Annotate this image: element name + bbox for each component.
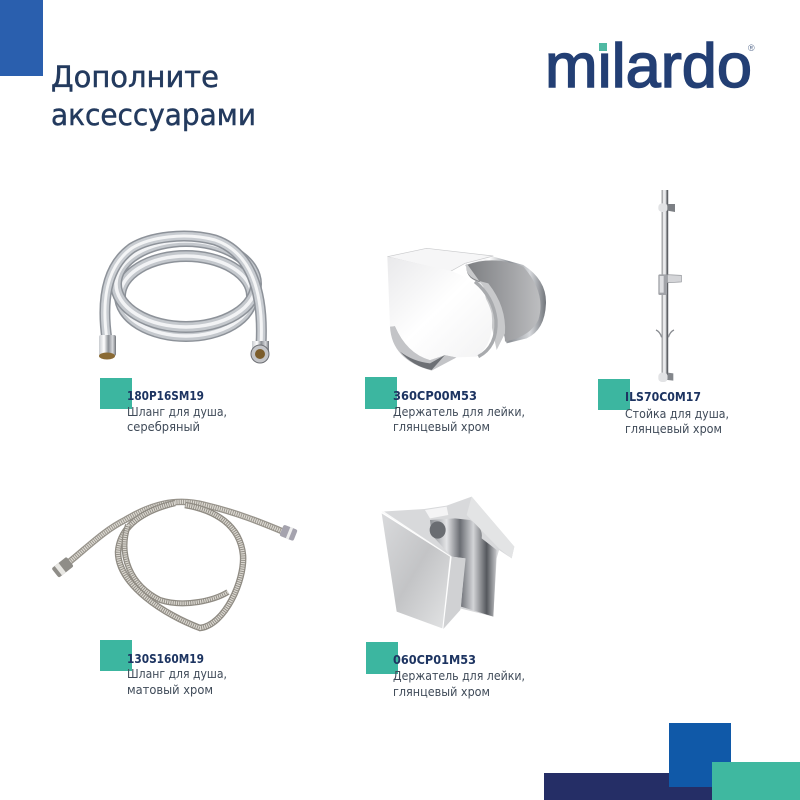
description: Шланг для душа, bbox=[127, 667, 227, 681]
description: Стойка для душа, bbox=[625, 407, 729, 421]
description: серебряный bbox=[127, 420, 200, 434]
description: глянцевый хром bbox=[393, 685, 490, 699]
description bbox=[127, 667, 227, 697]
description: глянцевый хром bbox=[625, 422, 722, 436]
description: Держатель для лейки, bbox=[393, 405, 525, 419]
teal square bbox=[366, 642, 398, 674]
teal square bbox=[365, 377, 397, 409]
description: матовый хром bbox=[127, 683, 213, 697]
description: Шланг для душа, bbox=[127, 405, 227, 419]
description bbox=[625, 407, 729, 436]
logo: milardo: ® bbox=[748, 43, 755, 53]
description: Держатель для лейки, bbox=[393, 669, 525, 683]
teal square bbox=[598, 379, 630, 410]
hose image bbox=[68, 502, 284, 628]
title: Дополните bbox=[51, 60, 219, 94]
hose image bbox=[105, 236, 261, 345]
product 4: metal hose bbox=[51, 502, 298, 697]
code: 180P16SM19 bbox=[127, 388, 204, 403]
hose connectors bbox=[51, 557, 74, 578]
product 1: silver hose bbox=[99, 236, 269, 434]
description bbox=[127, 405, 227, 434]
code: 130S160M19 bbox=[127, 651, 204, 666]
code: ILS70C0M17 bbox=[625, 389, 701, 404]
code: 360CP00M53 bbox=[393, 388, 477, 403]
title bbox=[51, 60, 256, 132]
product 2: white holder bbox=[365, 248, 546, 434]
teal square bbox=[100, 378, 132, 409]
holder image bbox=[387, 248, 546, 371]
product 5: chrome holder bbox=[366, 497, 525, 699]
code: 060CP01M53 bbox=[393, 652, 476, 667]
top-left blue block bbox=[0, 0, 43, 76]
product 3: shower rail bbox=[598, 190, 729, 436]
teal square bbox=[100, 640, 132, 671]
holder image bbox=[382, 497, 514, 629]
description: глянцевый хром bbox=[393, 420, 490, 434]
description bbox=[393, 405, 525, 434]
title: аксессуарами bbox=[51, 98, 256, 132]
bottom-right colour blocks bbox=[544, 723, 800, 800]
description bbox=[393, 669, 525, 699]
rail image bbox=[656, 190, 681, 382]
hose connectors bbox=[99, 335, 116, 356]
logo: milardo: milardo bbox=[545, 32, 752, 101]
